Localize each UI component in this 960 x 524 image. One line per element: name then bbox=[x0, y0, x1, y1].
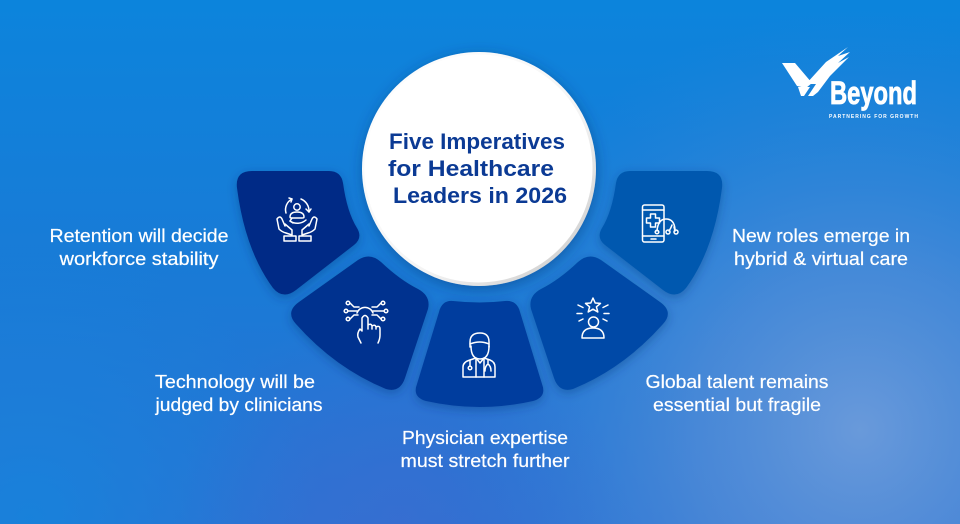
icon: person with star bbox=[577, 298, 609, 338]
center circle with title bbox=[362, 52, 596, 286]
label: retention bbox=[50, 226, 228, 269]
logo: Beyond bbox=[782, 47, 918, 120]
label: technology: Technology will be bbox=[155, 372, 315, 392]
label: technology bbox=[154, 372, 322, 415]
segment: global talent bbox=[530, 256, 668, 390]
label: physician bbox=[400, 428, 570, 471]
title: Five Imperatives bbox=[389, 129, 565, 154]
icon: finger touching network bbox=[344, 301, 388, 343]
label: retention: workforce stability bbox=[58, 249, 219, 269]
segment: technology bbox=[291, 256, 429, 390]
label: global talent: Global talent remains bbox=[646, 372, 828, 392]
logo: Beyond: Beyond bbox=[830, 75, 917, 111]
label: new roles bbox=[732, 226, 910, 269]
icon: doctor bbox=[463, 333, 495, 377]
label: retention: Retention will decide bbox=[50, 226, 228, 246]
label: technology: judged by clinicians bbox=[154, 395, 322, 415]
label: global talent: essential but fragile bbox=[653, 395, 821, 415]
label: global talent bbox=[646, 372, 828, 415]
segment: retention bbox=[237, 171, 359, 295]
segment: new roles bbox=[600, 171, 722, 295]
label: physician: must stretch further bbox=[400, 451, 570, 471]
title: Leaders in 2026 bbox=[393, 183, 567, 208]
segment: physician bbox=[416, 301, 543, 407]
icon: caring hands with person bbox=[277, 198, 317, 241]
title: for Healthcare bbox=[388, 156, 554, 181]
label: physician: Physician expertise bbox=[402, 428, 568, 448]
label: new roles: New roles emerge in bbox=[732, 226, 910, 246]
label: new roles: hybrid & virtual care bbox=[734, 249, 908, 269]
logo: Beyond: PARTNERING FOR GROWTH bbox=[829, 114, 918, 120]
title bbox=[388, 129, 567, 208]
icon: phone with stethoscope bbox=[642, 205, 678, 242]
